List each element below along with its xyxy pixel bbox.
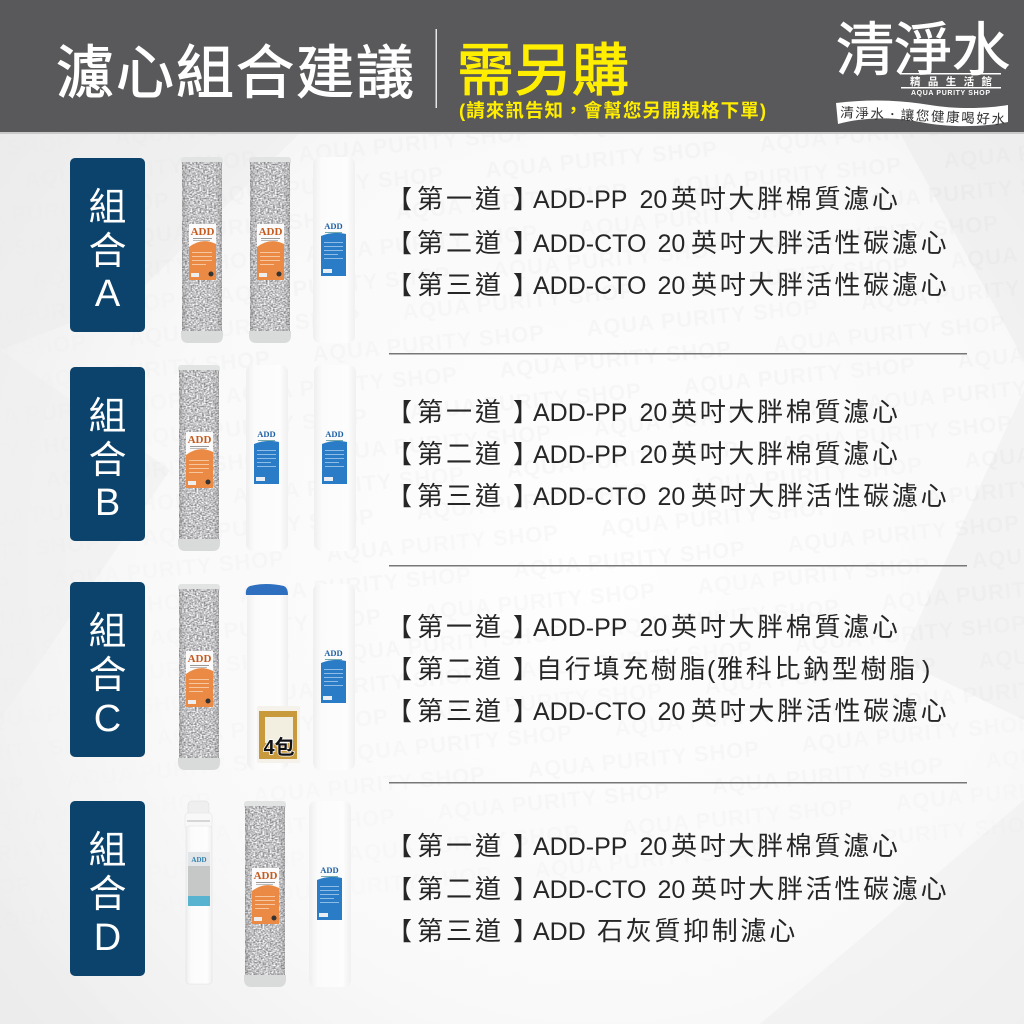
badge A bbox=[70, 158, 145, 332]
list D: 20 bbox=[658, 876, 685, 904]
list A: 英吋大胖棉質濾心 bbox=[671, 184, 901, 214]
logo ribbon: 清淨水．讓您健康喝好水 bbox=[840, 104, 1006, 127]
list B: ADD-PP bbox=[533, 399, 627, 427]
list D: 】 bbox=[513, 876, 538, 904]
resin bag, 4 packs: 4包 bbox=[263, 736, 295, 759]
list B: 】 bbox=[513, 483, 538, 511]
brand logo: 清淨水 bbox=[836, 18, 1010, 83]
list D: 第一道 bbox=[417, 831, 504, 861]
list C: ) bbox=[922, 656, 930, 684]
list C: 20 bbox=[658, 698, 685, 726]
filters C bbox=[178, 584, 355, 770]
list A: 20 bbox=[640, 186, 667, 214]
list A: 英吋大胖活性碳濾心 bbox=[691, 270, 949, 300]
filters B: ADD bbox=[188, 434, 211, 446]
list B: ADD-CTO bbox=[533, 483, 646, 511]
resin bag, 4 packs bbox=[257, 706, 300, 763]
filters A bbox=[181, 157, 355, 343]
list B: 】 bbox=[513, 441, 538, 469]
list A: 【 bbox=[387, 272, 412, 300]
badge C: 合 bbox=[88, 655, 127, 697]
list A: 】 bbox=[513, 186, 538, 214]
badge C: 組 bbox=[88, 611, 127, 653]
badge A: 組 bbox=[88, 187, 127, 229]
need separate purchase heading: 需另購 bbox=[457, 39, 629, 103]
badge A: A bbox=[95, 273, 121, 315]
list B: 20 bbox=[640, 441, 667, 469]
list D: 英吋大胖棉質濾心 bbox=[671, 831, 901, 861]
list C: 】 bbox=[513, 656, 538, 684]
list B: 【 bbox=[387, 483, 412, 511]
list A: 【 bbox=[387, 230, 412, 258]
list C: 【 bbox=[387, 614, 412, 642]
filters A: ADD bbox=[191, 226, 214, 238]
list C: 第三道 bbox=[417, 696, 504, 726]
list C: 自行填充樹脂 bbox=[536, 654, 708, 684]
filters D: ADD bbox=[320, 865, 339, 875]
list B: 【 bbox=[387, 441, 412, 469]
badge A: 合 bbox=[88, 231, 127, 273]
header divider bbox=[436, 29, 437, 108]
list C: 英吋大胖活性碳濾心 bbox=[691, 696, 949, 726]
header band bbox=[0, 0, 1024, 134]
list C: ADD-PP bbox=[533, 614, 627, 642]
badge C: C bbox=[94, 698, 121, 740]
filters B: ADD bbox=[257, 429, 276, 439]
list A: ADD-CTO bbox=[533, 230, 646, 258]
list C: 第一道 bbox=[417, 612, 504, 642]
badge D: 組 bbox=[88, 830, 127, 872]
list A: 第二道 bbox=[417, 228, 504, 258]
purchase note: (請來訊告知，會幫您另開規格下單) bbox=[459, 100, 766, 121]
filters D bbox=[185, 801, 351, 987]
brand logo: AQUA PURITY SHOP bbox=[911, 90, 990, 97]
badge B: B bbox=[95, 482, 120, 524]
list A: 】 bbox=[513, 272, 538, 300]
list D: 石灰質抑制濾心 bbox=[597, 916, 798, 946]
list A bbox=[387, 184, 949, 300]
resin cartridge with blue cap bbox=[246, 584, 288, 770]
list B: 第三道 bbox=[417, 481, 504, 511]
filters D: ADD bbox=[254, 870, 277, 882]
list C bbox=[387, 612, 949, 726]
filters A: ADD bbox=[324, 221, 343, 231]
list A: 20 bbox=[658, 230, 685, 258]
title: 濾心組合建議 bbox=[56, 41, 414, 106]
combination C bbox=[70, 582, 949, 770]
list D: 【 bbox=[387, 876, 412, 904]
brand logo: 精品生活館 bbox=[910, 75, 992, 88]
list D: ADD bbox=[533, 918, 586, 946]
list D: 第三道 bbox=[417, 916, 504, 946]
list D: 【 bbox=[387, 918, 412, 946]
list B: 第二道 bbox=[417, 439, 504, 469]
badge D: 合 bbox=[88, 874, 127, 916]
list B: 英吋大胖活性碳濾心 bbox=[691, 481, 949, 511]
list A: 】 bbox=[513, 230, 538, 258]
list C: 英吋大胖棉質濾心 bbox=[671, 612, 901, 642]
combination D bbox=[70, 801, 949, 987]
badge B bbox=[70, 367, 145, 541]
list A: 20 bbox=[658, 272, 685, 300]
list B: 【 bbox=[387, 399, 412, 427]
list C: 】 bbox=[513, 614, 538, 642]
list B: 第一道 bbox=[417, 397, 504, 427]
filters B: ADD bbox=[325, 429, 344, 439]
list C: ( bbox=[707, 656, 716, 684]
list C: 雅科比鈉型樹脂 bbox=[717, 654, 918, 684]
list B: 英吋大胖棉質濾心 bbox=[671, 439, 901, 469]
list C: 【 bbox=[387, 698, 412, 726]
list A: ADD-PP bbox=[533, 186, 627, 214]
list A: 第三道 bbox=[417, 270, 504, 300]
list B: ADD-PP bbox=[533, 441, 627, 469]
list B bbox=[387, 397, 949, 511]
list A: 【 bbox=[387, 186, 412, 214]
list B: 20 bbox=[640, 399, 667, 427]
list D: 】 bbox=[513, 833, 538, 861]
list C: 第二道 bbox=[417, 654, 504, 684]
list D: ADD-CTO bbox=[533, 876, 646, 904]
list D: 第二道 bbox=[417, 874, 504, 904]
list C: 】 bbox=[513, 698, 538, 726]
filters A: ADD bbox=[259, 226, 282, 238]
combination B bbox=[70, 365, 949, 551]
badge D bbox=[70, 801, 145, 976]
brand logo bbox=[836, 18, 1010, 127]
scale inhibitor filter bbox=[185, 801, 212, 984]
list C: 20 bbox=[640, 614, 667, 642]
filters C: ADD bbox=[188, 653, 211, 665]
list D: 20 bbox=[640, 833, 667, 861]
list D: 英吋大胖活性碳濾心 bbox=[691, 874, 949, 904]
badge D: D bbox=[94, 917, 121, 959]
list D: 】 bbox=[513, 918, 538, 946]
list D: ADD-PP bbox=[533, 833, 627, 861]
list A: ADD-CTO bbox=[533, 272, 646, 300]
combination A bbox=[70, 157, 949, 343]
badge B: 組 bbox=[88, 396, 127, 438]
list C: ADD-CTO bbox=[533, 698, 646, 726]
list D: 【 bbox=[387, 833, 412, 861]
list D bbox=[387, 831, 949, 946]
list C: 【 bbox=[387, 656, 412, 684]
list A: 英吋大胖活性碳濾心 bbox=[691, 228, 949, 258]
list A: 第一道 bbox=[417, 184, 504, 214]
list B: 英吋大胖棉質濾心 bbox=[671, 397, 901, 427]
filters C: ADD bbox=[324, 648, 343, 658]
list B: 】 bbox=[513, 399, 538, 427]
list B: 20 bbox=[658, 483, 685, 511]
badge C bbox=[70, 582, 145, 757]
filters B bbox=[178, 365, 356, 551]
scale inhibitor filter: ADD bbox=[191, 856, 207, 864]
badge B: 合 bbox=[88, 440, 127, 482]
